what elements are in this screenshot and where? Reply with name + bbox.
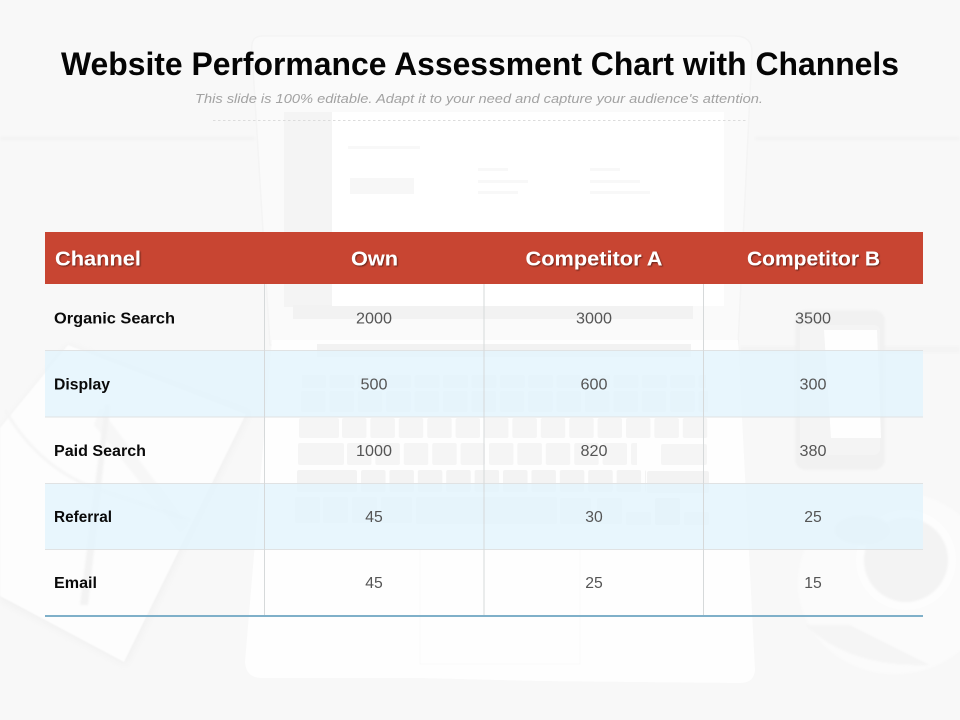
row: Paid Search: 820: [580, 443, 608, 460]
row: Email: 25: [585, 575, 603, 592]
row: Organic Search: Organic Search: [54, 310, 175, 328]
row: Referral: 30: [585, 509, 603, 526]
row: Organic Search: 3500: [795, 310, 831, 328]
table header: Competitor A: [526, 248, 662, 270]
row: Email: Email: [54, 575, 97, 592]
row: Display: 300: [800, 376, 827, 394]
row: Display: [54, 376, 827, 394]
row: Referral: 25: [804, 509, 822, 526]
laptop screen: [252, 36, 752, 345]
dashed divider: [213, 120, 746, 122]
table header: [45, 232, 923, 284]
row: Paid Search: Paid Search: [54, 443, 146, 460]
phone: [795, 310, 885, 470]
row: Referral: Referral: [54, 509, 112, 526]
row: Organic Search: 2000: [356, 310, 392, 328]
table row bands: [45, 351, 923, 549]
row: Display: Display: [54, 376, 110, 394]
title: Website Performance Assessment Chart with Channels: [61, 46, 899, 82]
subtitle: This slide is 100% editable. Adapt it to your need and capture your audience's attention.: [195, 91, 763, 106]
row: Display: 500: [360, 376, 388, 394]
keyboard: [295, 375, 710, 525]
table header: Competitor B: [747, 248, 880, 270]
row: Email: 45: [365, 575, 383, 592]
table header: Own: [351, 248, 398, 270]
row: Paid Search: 1000: [356, 443, 392, 460]
table: [45, 232, 923, 616]
laptop: [245, 36, 755, 683]
row: Email: 15: [804, 575, 822, 592]
row: Organic Search: 3000: [576, 310, 612, 328]
row: Display: 600: [580, 376, 608, 394]
row: Paid Search: 380: [800, 443, 827, 460]
desk plank lines: [0, 136, 960, 353]
coffee cup on saucer: [798, 492, 960, 674]
row: Paid Search: [54, 443, 827, 460]
row: Email: [54, 575, 822, 592]
table header: Channel: [55, 248, 141, 270]
row: Referral: 45: [365, 509, 383, 526]
laptop base: [245, 340, 755, 683]
notebook and pen: [0, 345, 250, 665]
row: Organic Search: [54, 310, 831, 328]
trackpad: [420, 550, 580, 664]
row: Referral: [54, 509, 822, 526]
